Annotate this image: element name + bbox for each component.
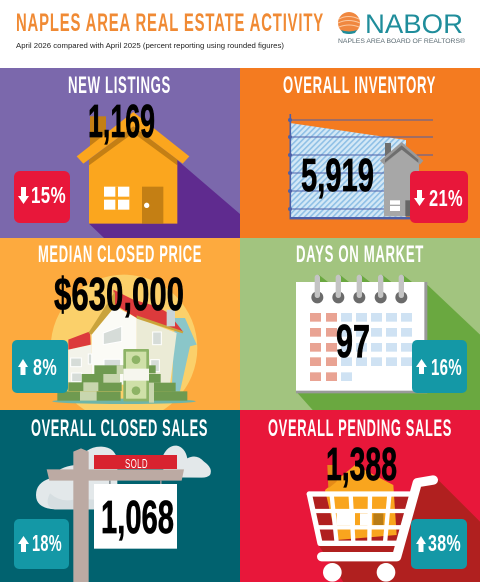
panel: overall closed sales — [0, 410, 240, 582]
icon: grey house — [380, 142, 423, 216]
icon: calendar — [296, 275, 480, 410]
subtitle: April 2026 compared with April 2025 (percent reporting using rounded figures) — [16, 41, 285, 50]
panel: new listings — [0, 68, 240, 238]
value: 1,068 — [101, 491, 174, 543]
badge: up 8%: 8% — [33, 354, 57, 380]
badge: up 16% — [412, 340, 467, 393]
badge: up 38% — [411, 519, 467, 569]
sign label: SOLD — [125, 456, 148, 471]
icon: house with money — [51, 275, 197, 421]
header — [0, 0, 480, 68]
logo: NABOR: NAPLES AREA BOARD OF REALTORS® — [338, 37, 465, 45]
heading: OVERALL CLOSED SALES — [31, 415, 208, 442]
badge: up 18%: 18% — [32, 530, 62, 556]
heading: NEW LISTINGS — [68, 72, 171, 99]
icon: clouds — [36, 446, 211, 509]
value: 97 — [336, 315, 370, 367]
value: $630,000 — [54, 268, 184, 320]
icon: shopping cart with house — [309, 465, 480, 582]
panel: median closed price — [0, 238, 240, 421]
badge: up 16%: 16% — [431, 354, 462, 380]
badge: down 21% — [410, 171, 468, 223]
badge: down 21%: 21% — [429, 185, 463, 211]
badge: up 18% — [14, 519, 69, 569]
icon: house — [77, 112, 240, 238]
logo: NABOR: NABOR — [365, 9, 463, 39]
chart: declining inventory — [288, 114, 433, 219]
panel: days on market — [240, 238, 480, 410]
panel: overall pending sales — [240, 410, 480, 582]
icon: sold sign — [47, 448, 184, 582]
panel: overall inventory — [240, 68, 480, 238]
badge: up 38%: 38% — [428, 530, 461, 556]
value: 1,388 — [326, 438, 397, 490]
logo: NABOR — [338, 9, 465, 45]
badge: down 15%: 15% — [31, 182, 66, 208]
value: 5,919 — [301, 149, 374, 201]
badge: down 15% — [14, 171, 70, 223]
badge: up 8% — [12, 340, 68, 393]
value: 1,169 — [88, 95, 155, 147]
heading: MEDIAN CLOSED PRICE — [38, 241, 202, 268]
